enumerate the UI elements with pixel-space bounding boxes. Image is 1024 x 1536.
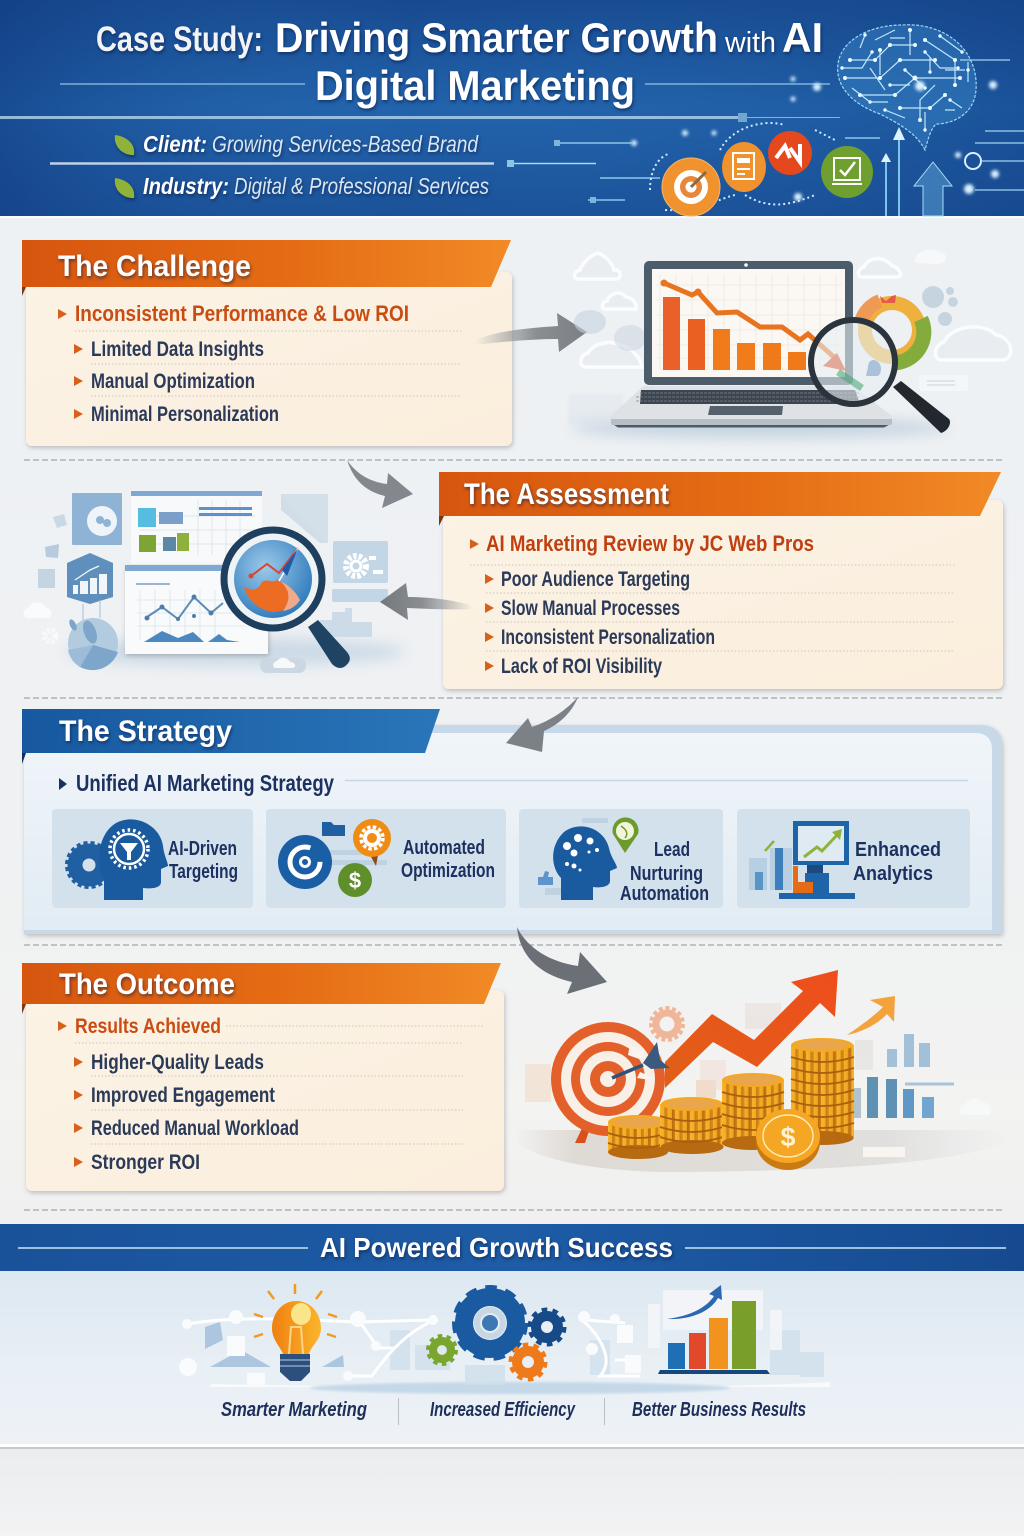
challenge list: Inconsistent Performance & Low ROI — [75, 301, 409, 326]
card: enhanced analytics — [737, 809, 970, 908]
top dashboard — [131, 491, 262, 564]
challenge list: Minimal Personalization — [91, 403, 279, 426]
small cloud — [260, 658, 306, 673]
arrow: challenge to laptop — [475, 313, 587, 352]
stack 3 — [722, 1073, 784, 1150]
outcome list: Improved Engagement — [91, 1084, 275, 1107]
stack 2 — [660, 1097, 724, 1154]
outcome list — [58, 1015, 483, 1174]
header banner — [0, 0, 1024, 218]
challenge list: Manual Optimization — [91, 370, 255, 393]
faded bars — [887, 1034, 930, 1067]
panel: growth benefits — [0, 1271, 1024, 1449]
section divider — [24, 944, 1002, 946]
illustration: target and coin growth — [515, 970, 1010, 1172]
card: automated optimization: Optimization — [401, 860, 495, 882]
card: AI-driven targeting — [52, 809, 253, 908]
icon: leaf bullet — [115, 178, 134, 198]
cloud and gear accents — [24, 602, 56, 642]
assessment list: AI Marketing Review by JC Web Pros — [486, 531, 814, 556]
challenge list — [58, 301, 462, 426]
section divider — [24, 459, 1002, 461]
icon: analytics monitor — [749, 821, 855, 899]
panel: the challenge — [22, 240, 512, 446]
section divider — [24, 1209, 1002, 1211]
label: increased efficiency: Increased Efficiency — [430, 1399, 576, 1421]
assessment list: Poor Audience Targeting — [501, 568, 690, 591]
icon: growth badge — [768, 131, 812, 175]
heading banner: the assessment — [439, 472, 1001, 526]
icon: automation set: $ — [349, 868, 361, 893]
orange gear — [511, 1345, 545, 1379]
icon: leaf bullet — [115, 135, 134, 155]
icon: growth hexagon — [67, 553, 113, 620]
heading banner: the challenge: The Challenge — [58, 250, 251, 283]
card: automated optimization — [266, 809, 506, 908]
title: Case Study: — [96, 20, 263, 59]
icon: light bulb — [254, 1284, 337, 1381]
gear accent — [651, 1008, 683, 1040]
card: lead nurturing automation: Lead — [654, 839, 690, 861]
card: automated optimization: Automated — [403, 837, 485, 859]
icon: automation set — [278, 819, 391, 897]
icon: profile square — [72, 493, 122, 545]
faded background tiles — [38, 494, 388, 637]
big dollar coin: $ — [780, 1122, 796, 1152]
card: lead nurturing automation — [519, 809, 723, 908]
laptop base — [611, 386, 892, 428]
faded chart backdrop — [525, 1003, 873, 1102]
banner: AI powered growth success: AI Powered Growth Success — [320, 1232, 673, 1263]
panel: the outcome — [22, 963, 504, 1191]
icon: checkmark badge — [821, 146, 873, 198]
card: enhanced analytics: Enhanced — [855, 839, 941, 861]
label: smarter marketing: Smarter Marketing — [221, 1399, 367, 1421]
assessment list — [470, 531, 955, 678]
panel: the assessment — [439, 472, 1003, 689]
heading banner: the strategy: The Strategy — [59, 715, 232, 748]
section divider — [24, 697, 1002, 699]
laptop screen — [644, 261, 853, 385]
arrow: challenge to assessment — [347, 460, 413, 508]
client line: Growing Services-Based Brand — [212, 131, 479, 157]
icon: pie chart — [68, 618, 118, 670]
trend line arrow — [660, 280, 846, 371]
outcome list: Reduced Manual Workload — [91, 1117, 299, 1140]
title — [96, 14, 823, 109]
heading banner: the outcome — [22, 963, 501, 1014]
icon: document badge — [722, 142, 766, 192]
card: lead nurturing automation: Automation — [620, 883, 709, 905]
outcome list: Higher-Quality Leads — [91, 1051, 264, 1074]
icon: rising bar chart — [658, 1285, 770, 1374]
label: better business results: Better Business Results — [632, 1399, 806, 1421]
glowing circuit dots — [554, 60, 1024, 210]
heading banner: the challenge — [22, 240, 511, 296]
arrow: strategy to outcome — [517, 927, 607, 994]
faded network backdrop — [179, 1290, 830, 1394]
industry line — [115, 173, 489, 199]
heading banner: the assessment: The Assessment — [464, 478, 669, 511]
outcome list: Results Achieved — [75, 1015, 221, 1038]
icon: big growth arrow — [665, 970, 838, 1088]
strategy subheading: Unified AI Marketing Strategy — [76, 770, 334, 796]
icon: head with gears — [67, 819, 168, 900]
background clouds — [574, 250, 1011, 391]
magnifying glass — [224, 530, 350, 668]
icon: bullseye target — [551, 1022, 665, 1143]
heading banner: the strategy — [22, 709, 440, 764]
industry line: Industry: — [143, 173, 229, 199]
outcome list: Stronger ROI — [91, 1151, 200, 1174]
banner: AI powered growth success — [0, 1224, 1024, 1271]
title: Driving Smarter Growth — [275, 14, 718, 61]
small navy gear — [530, 1310, 564, 1344]
assessment list: Lack of ROI Visibility — [501, 655, 662, 678]
bottom dashboard — [125, 565, 268, 654]
stack 4 — [790, 1038, 854, 1145]
card: enhanced analytics: Analytics — [853, 863, 933, 885]
blue bars — [854, 1077, 954, 1118]
industry line: Digital & Professional Services — [234, 173, 489, 199]
card: AI-driven targeting: Targeting — [169, 861, 238, 883]
arrow: assessment to dashboards — [380, 583, 473, 620]
icon: head with ideas — [538, 817, 638, 900]
panel: the strategy — [22, 709, 1002, 934]
small cloud — [960, 1098, 991, 1115]
challenge list: Limited Data Insights — [91, 338, 264, 361]
title: Digital Marketing — [315, 62, 635, 109]
title: with — [724, 27, 776, 59]
card: AI-driven targeting: AI-Driven — [168, 838, 237, 860]
stack 1 — [608, 1115, 668, 1159]
icon: dart — [612, 1042, 670, 1080]
heading banner: the outcome: The Outcome — [59, 968, 235, 1001]
magnifying glass — [811, 320, 950, 433]
icon: gears — [428, 1289, 564, 1379]
illustration: analytics dashboards — [24, 491, 405, 673]
icon: small orange arrow — [847, 996, 895, 1035]
title: AI — [782, 14, 823, 61]
big dollar coin — [756, 1109, 820, 1170]
client line: Client: — [143, 131, 207, 157]
arrow: strategy heading pointer — [506, 697, 578, 752]
client line — [115, 131, 479, 157]
illustration: laptop with declining chart — [568, 250, 1011, 438]
card: lead nurturing automation: Nurturing — [630, 863, 703, 885]
floor shadow — [515, 1130, 1010, 1172]
large blue gear — [456, 1289, 524, 1357]
icon: upward arrows — [881, 127, 952, 216]
bar chart — [663, 297, 806, 370]
icon: target badge — [662, 158, 720, 216]
assessment list: Inconsistent Personalization — [501, 626, 715, 649]
green gear — [428, 1336, 456, 1364]
assessment list: Slow Manual Processes — [501, 597, 680, 620]
donut chart — [861, 295, 924, 363]
icon: AI circuit brain — [838, 25, 976, 150]
coin stacks — [608, 1038, 854, 1170]
